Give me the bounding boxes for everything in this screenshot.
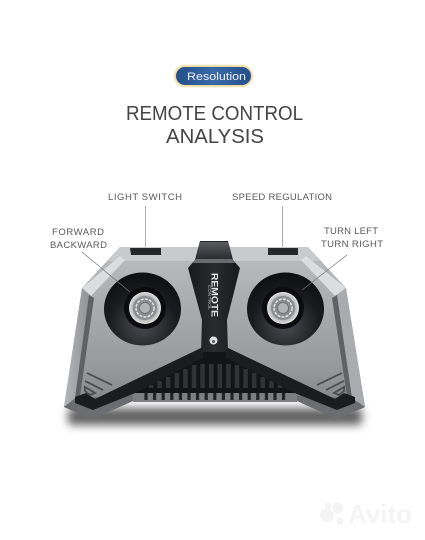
label: light switch: LIGHT SWITCH <box>108 192 182 203</box>
label: light switch <box>108 192 182 248</box>
top face lighter band <box>108 247 320 261</box>
label: forward backward <box>50 227 130 292</box>
right vent marks <box>317 373 344 395</box>
badge: Resolution: Resolution <box>187 71 246 83</box>
spine top highlight <box>196 242 232 259</box>
label: forward backward: FORWARD <box>52 227 104 238</box>
right bevel highlight <box>301 256 346 296</box>
bottom left edge <box>64 395 142 419</box>
left bevel highlight <box>82 256 125 296</box>
label: speed regulation <box>232 192 332 248</box>
left side strip <box>64 288 91 407</box>
label: turn left turn right: TURN LEFT <box>324 226 378 237</box>
vent teeth <box>146 393 284 400</box>
spine indicator light <box>210 336 218 344</box>
spine label REMOTE CONTROL: CONTROL <box>207 285 212 311</box>
title: ANALYSIS <box>166 125 264 148</box>
remote control body <box>64 241 365 419</box>
watermark: Avito: Avito <box>348 499 412 529</box>
title <box>126 102 303 148</box>
body shell <box>64 247 365 419</box>
right black V arm <box>226 347 355 410</box>
left black V arm <box>75 347 203 410</box>
centre dark spine <box>188 241 240 352</box>
badge: Resolution <box>174 65 253 87</box>
label: forward backward: BACKWARD <box>50 240 107 251</box>
vent fins <box>134 350 296 393</box>
label: turn left turn right <box>302 226 383 290</box>
left top button <box>130 248 161 255</box>
title: REMOTE CONTROL <box>126 102 303 125</box>
right top button <box>268 248 298 255</box>
label: speed regulation: SPEED REGULATION <box>232 192 332 203</box>
watermark: Avito <box>320 499 412 529</box>
bottom right edge <box>288 395 365 419</box>
label: turn left turn right: TURN RIGHT <box>321 239 383 250</box>
spine label REMOTE CONTROL: REMOTE <box>210 273 220 317</box>
left vent marks <box>85 373 112 395</box>
right joystick <box>247 272 324 346</box>
left joystick <box>104 272 181 346</box>
controller shadow <box>68 408 362 425</box>
bottom centre edge <box>133 392 297 402</box>
right side strip <box>335 288 365 407</box>
